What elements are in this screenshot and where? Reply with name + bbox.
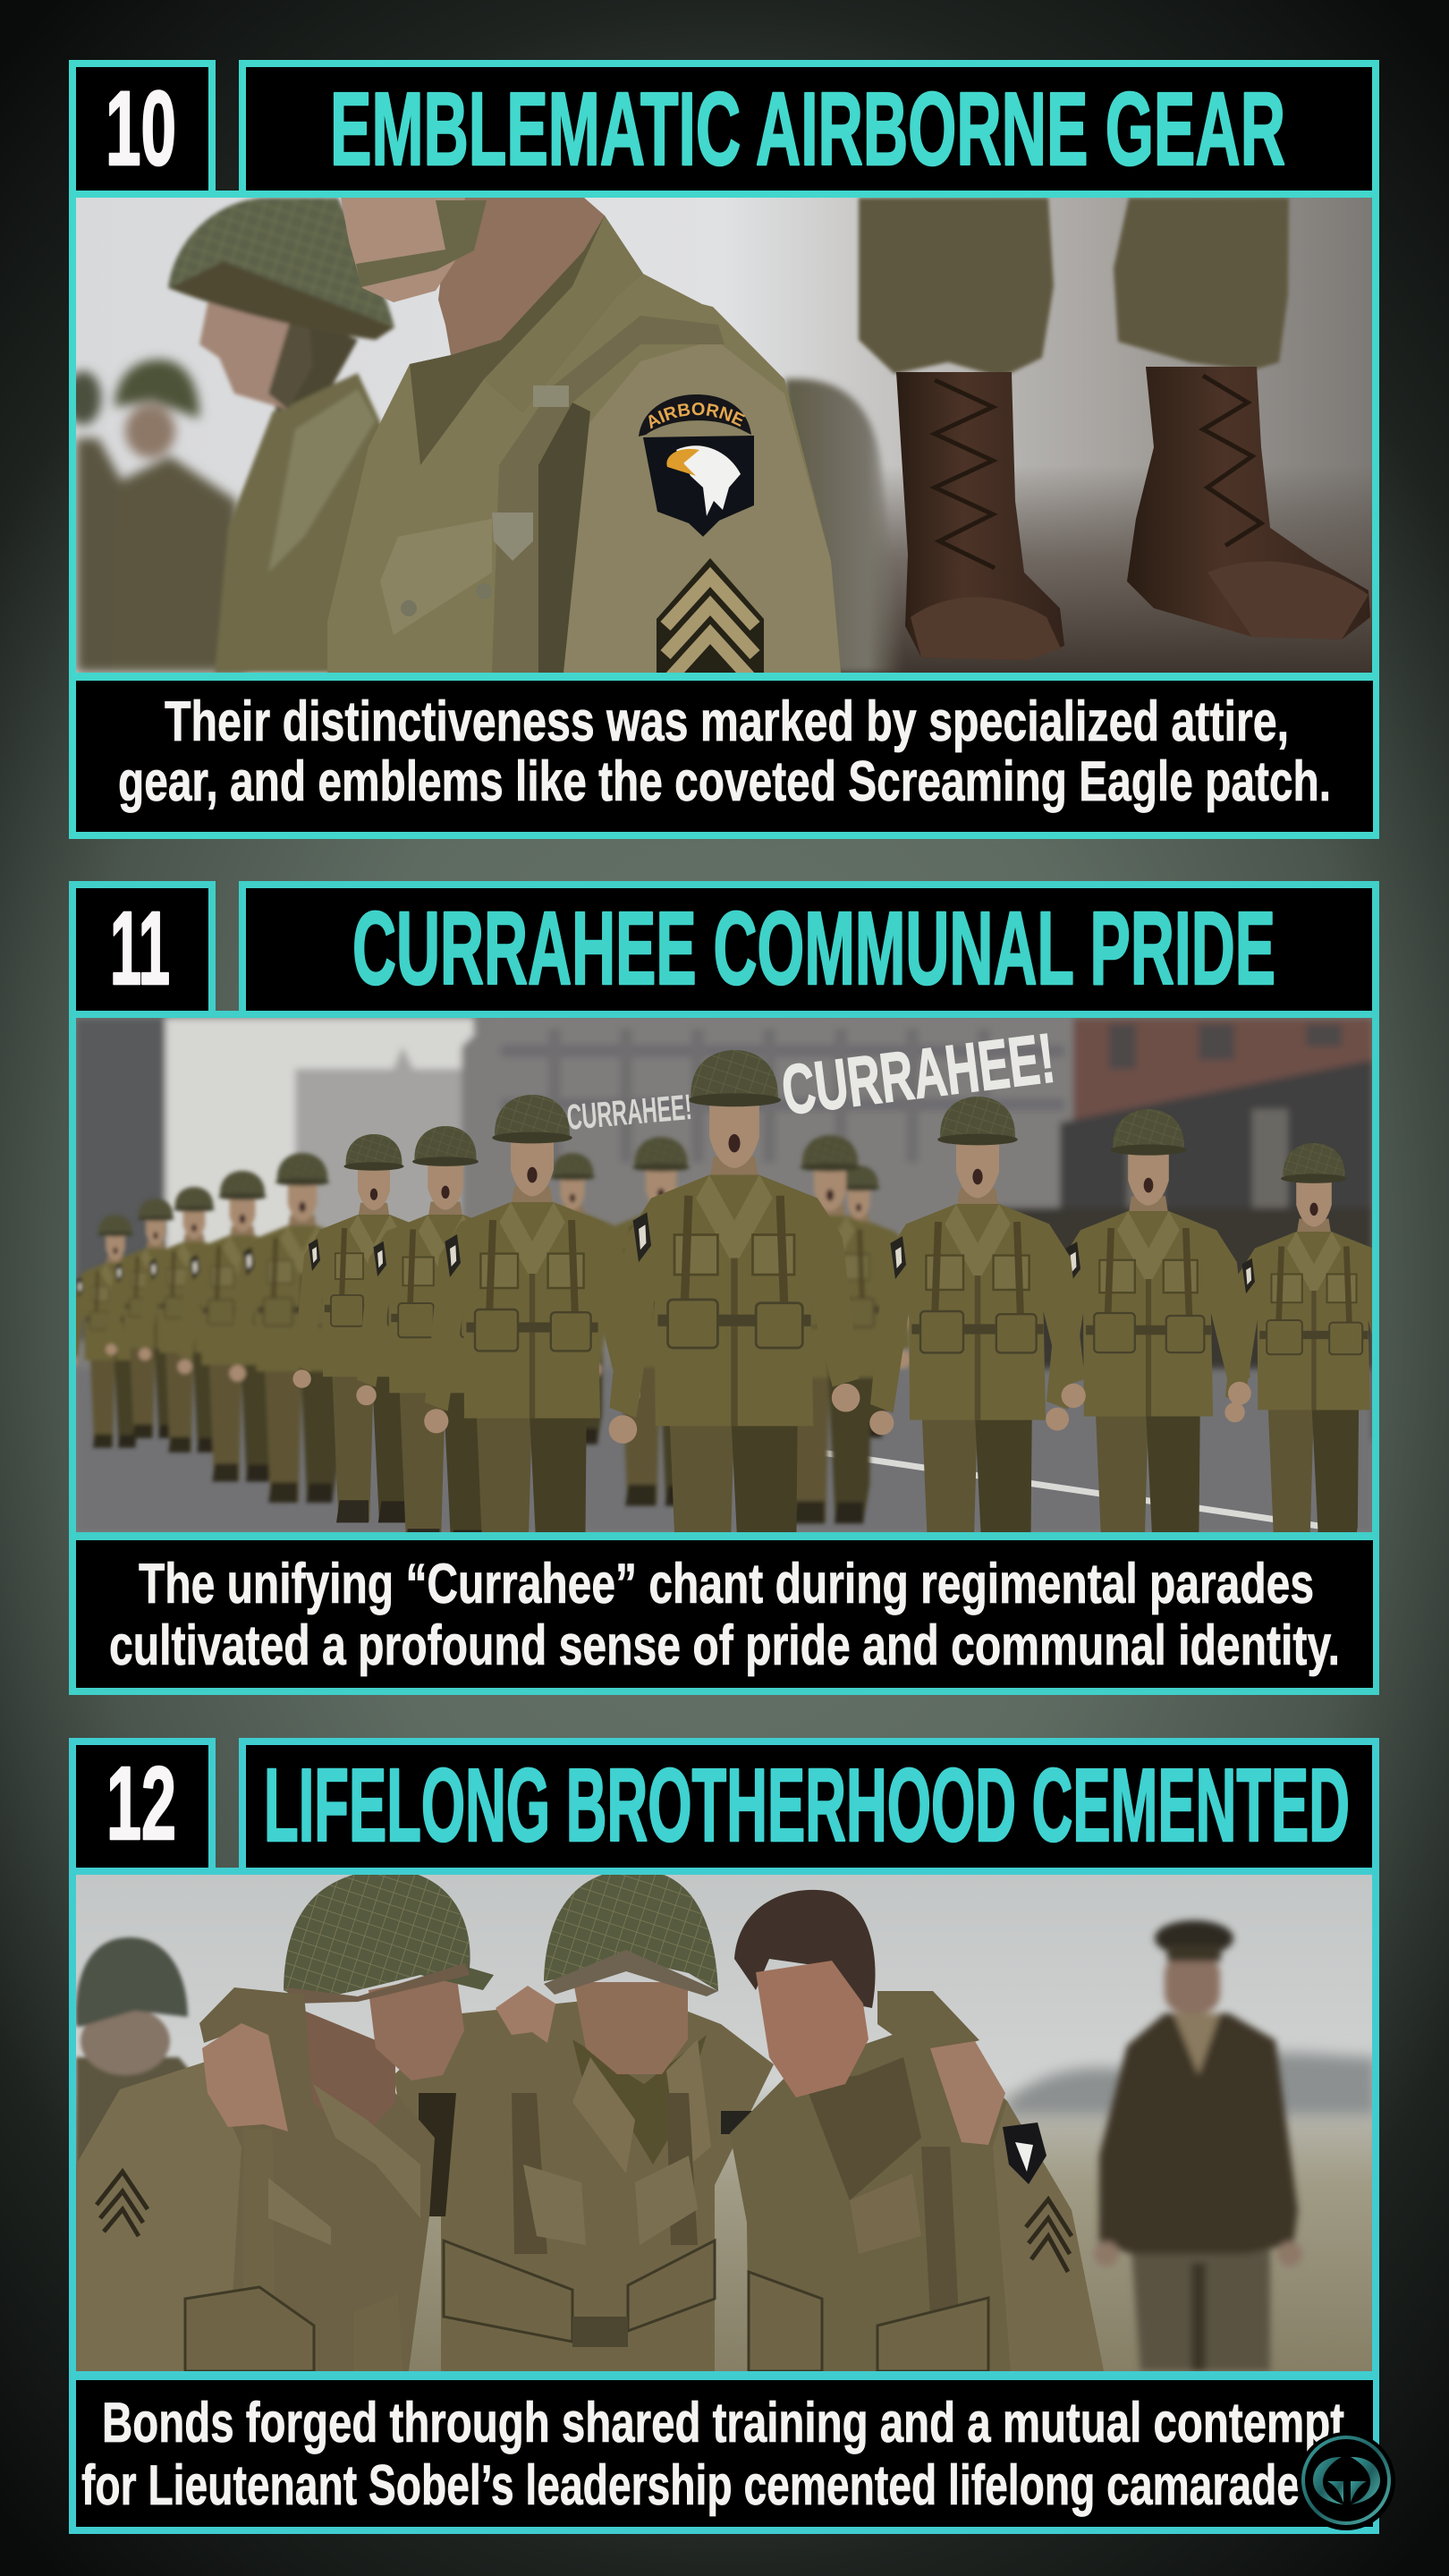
right chevron and patch (1026, 2199, 1072, 2272)
photo: soldier with patch and jump boots (76, 198, 1372, 673)
patch: screaming eagle (639, 394, 754, 537)
road with lane line (76, 1368, 1373, 1532)
number badge 10 (72, 64, 212, 194)
photo: regiment marching through the street (67, 1018, 1403, 1652)
number badge 11 (72, 885, 212, 1014)
panel: lifelong brotherhood cemented (72, 1741, 1377, 2530)
officer in background (1094, 1920, 1302, 2371)
sleeve (555, 340, 841, 673)
number badge 12: 12 (106, 1745, 176, 1861)
blurred rear soldiers (65, 360, 246, 673)
dark shadow under the arm (419, 2093, 456, 2216)
number badge 12 (72, 1741, 212, 1871)
shout lettering (565, 1018, 1059, 1138)
backpack fading into mist (784, 379, 903, 673)
chest pocket (380, 519, 492, 635)
shout lettering: CURRAHEE! (777, 1018, 1059, 1130)
rear ranks (67, 1135, 915, 1523)
shoulder strap and harness (492, 316, 724, 673)
front marchers (292, 1050, 1403, 1652)
shirt and collar (410, 216, 615, 465)
patch: screaming eagle: AIRBORNE (648, 402, 745, 429)
panel: currahee communal pride (67, 885, 1403, 1691)
shout lettering: CURRAHEE! (565, 1088, 693, 1138)
icon: circular watermark logo (1297, 2432, 1395, 2530)
number badge 10: 10 (106, 70, 176, 188)
panel: emblematic airborne gear (69, 60, 1379, 839)
trousers and boots (859, 198, 1370, 660)
center soldier (394, 1869, 774, 2371)
frame and caption (72, 1011, 1376, 1691)
street buildings and sky (76, 1018, 1373, 1440)
neck (438, 198, 605, 355)
right soldier (730, 1890, 1104, 2371)
rear-left soldier (76, 1937, 201, 2182)
left chevron (97, 2172, 148, 2236)
chevrons (657, 558, 764, 683)
chin strap (356, 200, 487, 287)
third soldier, helmet in profile (168, 198, 394, 673)
main soldier torso (327, 216, 841, 673)
number badge 11: 11 (110, 890, 170, 1006)
face (341, 198, 465, 302)
frame and caption (72, 1868, 1376, 2530)
left soldier (76, 1869, 494, 2371)
arm across the left soldier with hand (199, 1986, 555, 2131)
treeline (1007, 2053, 1377, 2115)
photo: three soldiers and the officer (76, 1869, 1377, 2371)
frame and caption (72, 191, 1376, 835)
